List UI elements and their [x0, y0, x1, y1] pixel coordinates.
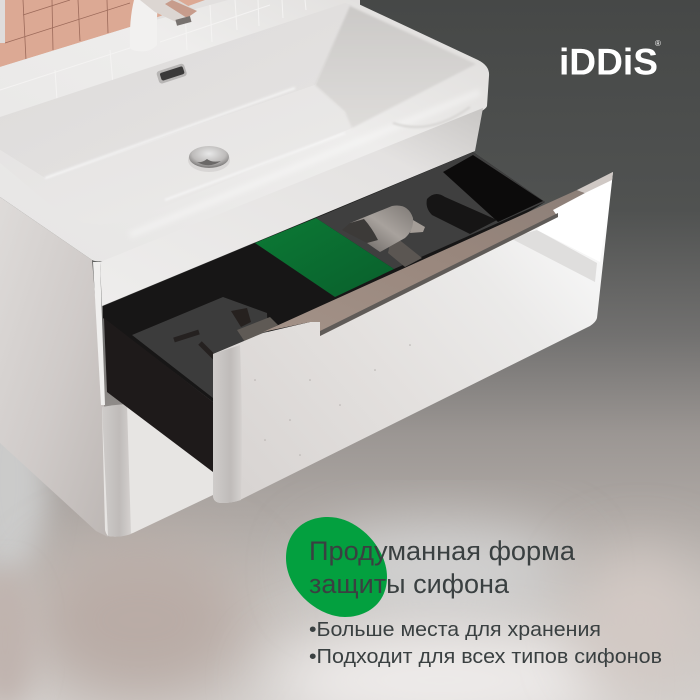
registered mark: ® [655, 39, 661, 48]
glossy reflection [510, 230, 597, 282]
basin highlight lines [45, 88, 345, 200]
drawer interior [103, 152, 545, 402]
bullet list: •Больше места для хранения [309, 619, 601, 641]
speckles [254, 344, 411, 456]
faucet [130, 0, 197, 51]
heading: Продуманная форма [309, 536, 575, 566]
right compartment [316, 152, 545, 269]
green blob [286, 517, 387, 617]
IDDIS logo: iDDiS [559, 42, 658, 82]
right inner wall of bowl [315, 6, 476, 128]
towel [132, 297, 268, 398]
handle strip [263, 172, 613, 336]
upper drawer side wall [104, 318, 213, 472]
basin deck and rim [0, 0, 489, 261]
front rounded left edge [213, 345, 242, 503]
heading [309, 536, 575, 599]
razor accessory [231, 308, 251, 327]
open drawer front [213, 172, 613, 503]
drawer front panel [213, 172, 613, 503]
basin floor [0, 85, 352, 225]
glass accessory [237, 317, 278, 342]
dark tube [427, 194, 497, 234]
cabinet upper front band [100, 108, 483, 306]
overflow slot [156, 63, 187, 84]
rim reflection curve [393, 107, 470, 127]
lower drawer [102, 404, 213, 537]
razor [174, 332, 217, 360]
cabinet left side panel [0, 197, 108, 537]
lower drawer rounded edge [102, 404, 131, 537]
basin back wall [0, 3, 352, 178]
bullet list: •Подходит для всех типов сифонов [309, 646, 662, 668]
cabinet corner strip [93, 262, 105, 405]
basin [0, 0, 489, 261]
green divider [255, 218, 394, 297]
front rim highlight [130, 92, 480, 235]
deck tile reflection [0, 0, 306, 100]
hair dryer [342, 206, 425, 267]
drain plug [188, 146, 230, 172]
bullet list [309, 619, 662, 668]
lower drawer white front [102, 404, 213, 537]
heading: защиты сифона [309, 569, 509, 599]
wall tiles [0, 0, 360, 120]
